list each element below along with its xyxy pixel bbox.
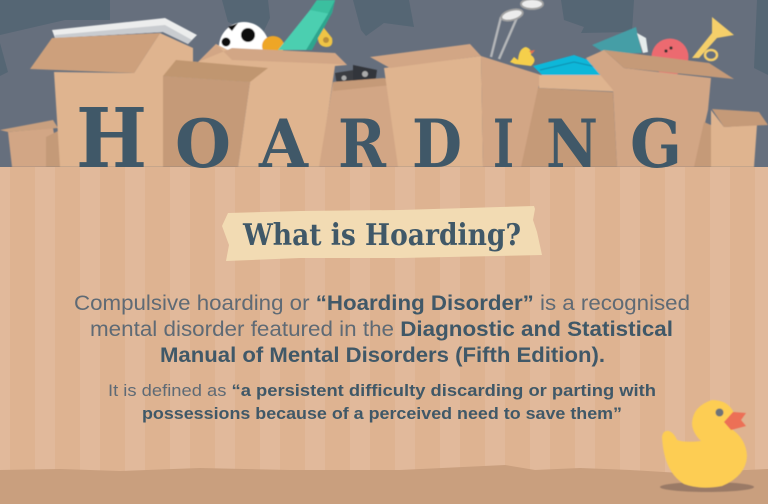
description text: Manual of Mental Disorders (Fifth Edition). bbox=[160, 344, 605, 367]
box with dark front bbox=[163, 76, 250, 167]
title: O bbox=[175, 105, 231, 183]
description text: Compulsive hoarding or “Hoarding Disorder” is a recognised bbox=[74, 292, 690, 315]
icon: small duck bbox=[510, 47, 535, 66]
title: N bbox=[546, 105, 598, 183]
middle dark box bbox=[521, 75, 624, 167]
title: D bbox=[412, 105, 462, 183]
orange toy bbox=[262, 36, 284, 56]
low box bbox=[319, 78, 405, 167]
icon: rubber duck bbox=[660, 400, 754, 492]
floor bbox=[0, 465, 768, 504]
stacked boxes and contents bbox=[0, 0, 768, 167]
banner heading: What is Hoarding? bbox=[242, 218, 521, 253]
right large box bbox=[586, 50, 734, 167]
definition text bbox=[108, 381, 656, 423]
title: I bbox=[493, 105, 514, 183]
title: G bbox=[630, 105, 682, 183]
large centre box bbox=[370, 44, 541, 167]
striped lower panel bbox=[0, 167, 768, 504]
wide box behind bbox=[163, 44, 347, 167]
banner bbox=[222, 206, 542, 261]
description text bbox=[74, 292, 690, 367]
icon: golf clubs bbox=[491, 0, 543, 59]
title: R bbox=[338, 105, 387, 183]
title bbox=[76, 91, 682, 187]
icon: skateboard bbox=[278, 0, 335, 50]
definition text: possessions because of a perceived need to save them” bbox=[142, 404, 622, 423]
icon: soccer ball bbox=[219, 22, 269, 72]
teal book bbox=[592, 27, 648, 54]
description text: mental disorder featured in the Diagnostic and Statistical bbox=[90, 318, 673, 341]
small left box bbox=[0, 120, 62, 167]
blue towels bbox=[533, 55, 622, 75]
title: H bbox=[76, 91, 147, 187]
small right box bbox=[694, 109, 768, 167]
definition text: It is defined as “a persistent difficulty discarding or parting with bbox=[108, 381, 656, 400]
papers bbox=[52, 18, 197, 44]
title: A bbox=[258, 105, 309, 183]
tapes bbox=[335, 65, 377, 86]
icon: trumpet bbox=[692, 17, 734, 60]
background shapes bbox=[0, 0, 768, 76]
icon: bowling ball bbox=[652, 38, 688, 76]
tall box with flaps bbox=[30, 33, 193, 167]
